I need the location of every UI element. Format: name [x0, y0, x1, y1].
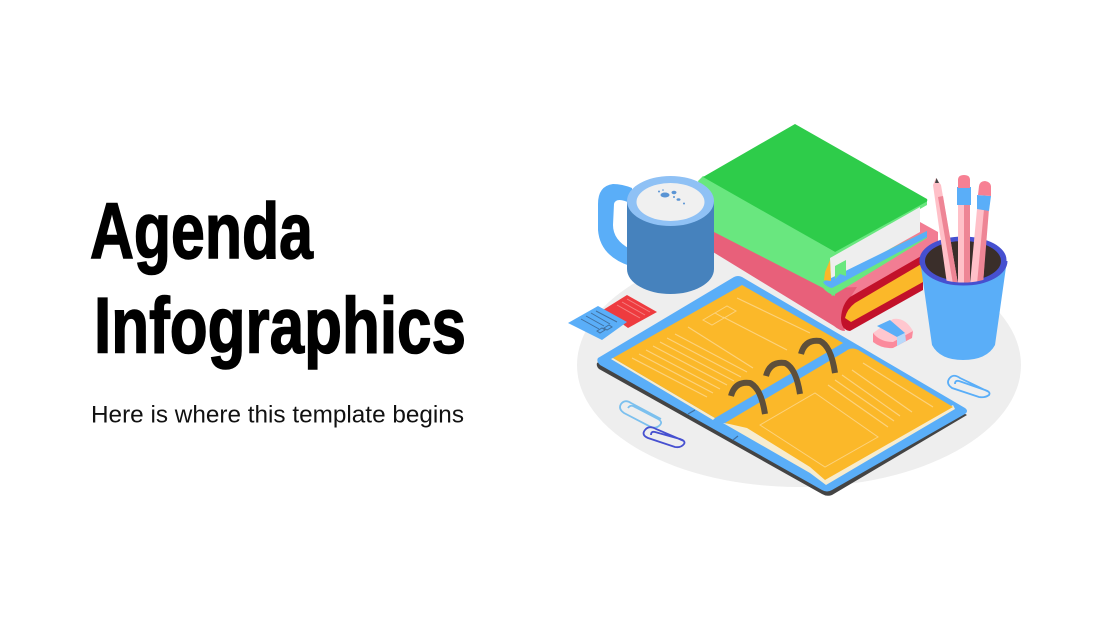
illustration: desk with stationery: [568, 124, 1021, 496]
icon: red book: [713, 222, 938, 331]
cup body: [920, 260, 1007, 360]
icon: coffee mug: [598, 176, 714, 294]
binder rings: [731, 341, 835, 414]
icon: green book: [698, 124, 927, 296]
icon: pencil cup: [920, 175, 1007, 360]
desk shadow: [577, 243, 1021, 487]
right page: [723, 348, 955, 485]
pencils: [933, 175, 991, 286]
icon: open planner: [597, 276, 967, 496]
left page: [611, 285, 843, 420]
icon: paperclips: [620, 376, 990, 447]
title: [90, 186, 466, 370]
icon: eraser: [873, 319, 913, 348]
title: Infographics: [94, 280, 466, 370]
subtitle: Here is where this template begins: [91, 402, 464, 428]
icon: sticky notes: [568, 295, 657, 340]
title: Agenda: [90, 186, 314, 275]
